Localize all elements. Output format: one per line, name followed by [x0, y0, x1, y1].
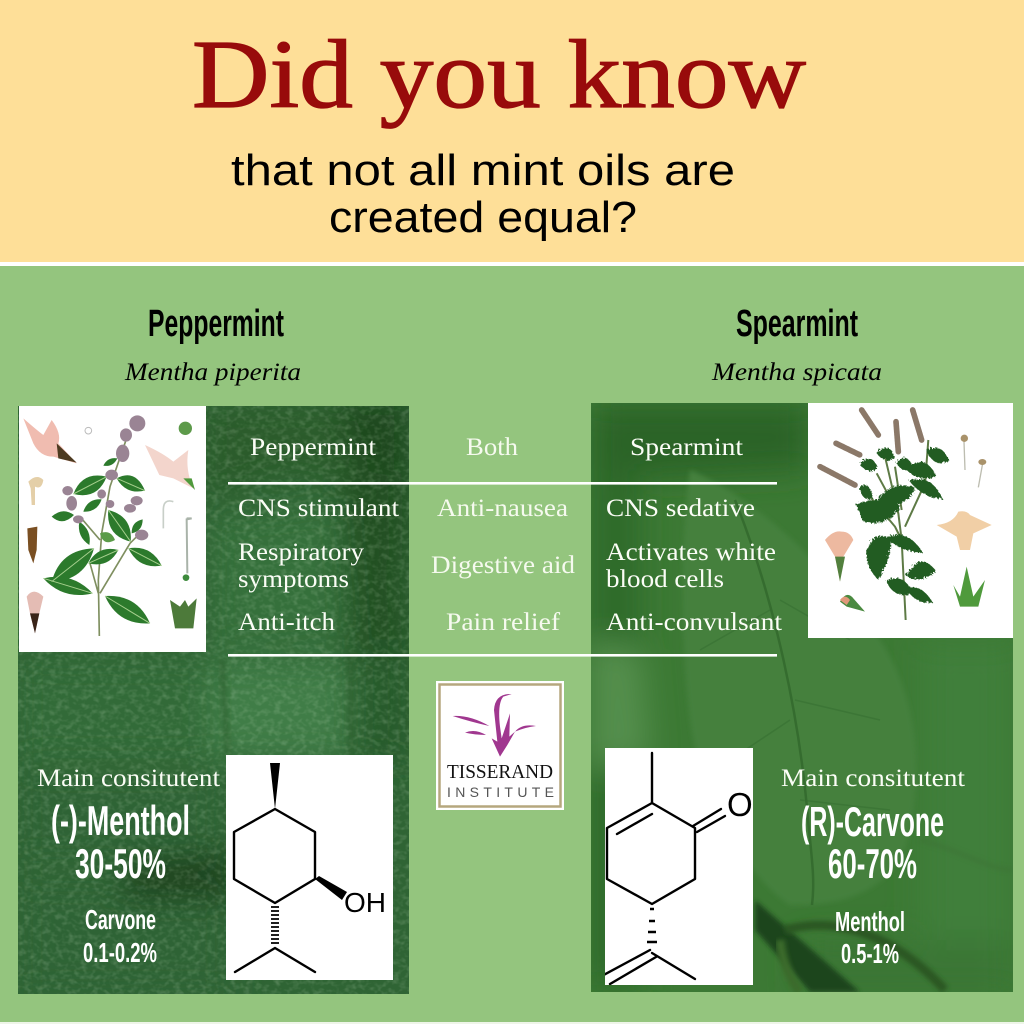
callout: spearmint constituents: Main consitutent — [781, 765, 965, 792]
molecule: carvone: O — [727, 786, 753, 823]
heading: peppermint: Peppermint — [148, 303, 284, 345]
illustration: spearmint plant — [808, 403, 1013, 638]
heading: spearmint — [711, 303, 882, 386]
flower spikes — [62, 415, 148, 540]
peppermint leaves — [43, 458, 162, 623]
column: spearmint: CNS sedative — [606, 495, 755, 522]
callout: spearmint constituents: 60-70% — [828, 840, 917, 887]
column: peppermint: Respiratory — [238, 539, 365, 566]
subtitle — [231, 146, 735, 242]
header band — [0, 0, 1024, 262]
callout: peppermint constituents: Carvone — [85, 904, 156, 935]
column: both: Pain relief — [446, 609, 561, 636]
logo: Tisserand Institute: INSTITUTE — [447, 784, 554, 800]
green background — [0, 266, 1024, 1022]
column: spearmint: Activates white — [606, 539, 776, 566]
column: peppermint — [238, 434, 399, 636]
illustration: peppermint plant — [19, 406, 206, 652]
logo: Tisserand Institute: TISSERAND — [447, 761, 553, 783]
stem — [755, 900, 860, 992]
column: both: Anti-nausea — [437, 495, 568, 522]
column: peppermint: symptoms — [238, 566, 349, 593]
flower spikes — [820, 410, 922, 485]
heading: spearmint: Spearmint — [736, 303, 858, 345]
callout: peppermint constituents: (-)-Menthol — [51, 797, 190, 844]
heading: peppermint — [124, 303, 301, 386]
column: both: Both — [466, 434, 519, 461]
flower details — [23, 418, 77, 463]
callout: peppermint constituents: Main consitutent — [37, 765, 220, 792]
column: both — [431, 434, 576, 636]
callout: spearmint constituents: Menthol — [835, 906, 905, 937]
callout: peppermint constituents: 30-50% — [75, 840, 166, 887]
column: spearmint — [606, 434, 782, 636]
flower details — [937, 511, 992, 550]
comparison table — [228, 434, 782, 657]
column: spearmint: Anti-convulsant — [606, 609, 782, 636]
rule: top — [228, 482, 777, 485]
stems — [80, 433, 142, 636]
callout: spearmint constituents — [781, 765, 965, 969]
column: peppermint: Peppermint — [250, 434, 376, 461]
panel: peppermint leaf background — [18, 400, 409, 994]
subtitle: that not all mint oils are — [231, 146, 735, 195]
column: spearmint: blood cells — [606, 566, 724, 593]
callout: peppermint constituents — [37, 765, 220, 968]
stems — [870, 440, 928, 620]
icon: purple plant — [453, 694, 536, 757]
column: peppermint: CNS stimulant — [238, 495, 399, 522]
jagged leaves — [855, 447, 948, 602]
large leaf — [682, 470, 916, 905]
panel: spearmint leaf background — [591, 403, 1013, 992]
rule: bottom — [228, 654, 777, 657]
molecule: carvone — [600, 748, 753, 985]
callout: peppermint constituents: 0.1-0.2% — [83, 937, 157, 968]
callout: spearmint constituents: 0.5-1% — [841, 938, 899, 969]
leaf midribs — [43, 477, 162, 623]
heading: spearmint: Mentha spicata — [711, 359, 882, 386]
logo: Tisserand Institute — [436, 681, 564, 810]
molecule: menthol — [226, 755, 393, 980]
heading: peppermint: Mentha piperita — [124, 359, 301, 386]
bottom edge — [0, 1022, 1024, 1024]
column: both: Digestive aid — [431, 552, 576, 579]
column: peppermint: Anti-itch — [238, 609, 336, 636]
subtitle: created equal? — [329, 193, 637, 242]
title: Did you know — [192, 21, 806, 129]
divider — [0, 262, 1024, 266]
column: spearmint: Spearmint — [630, 434, 743, 461]
molecule: menthol: OH — [344, 887, 386, 918]
